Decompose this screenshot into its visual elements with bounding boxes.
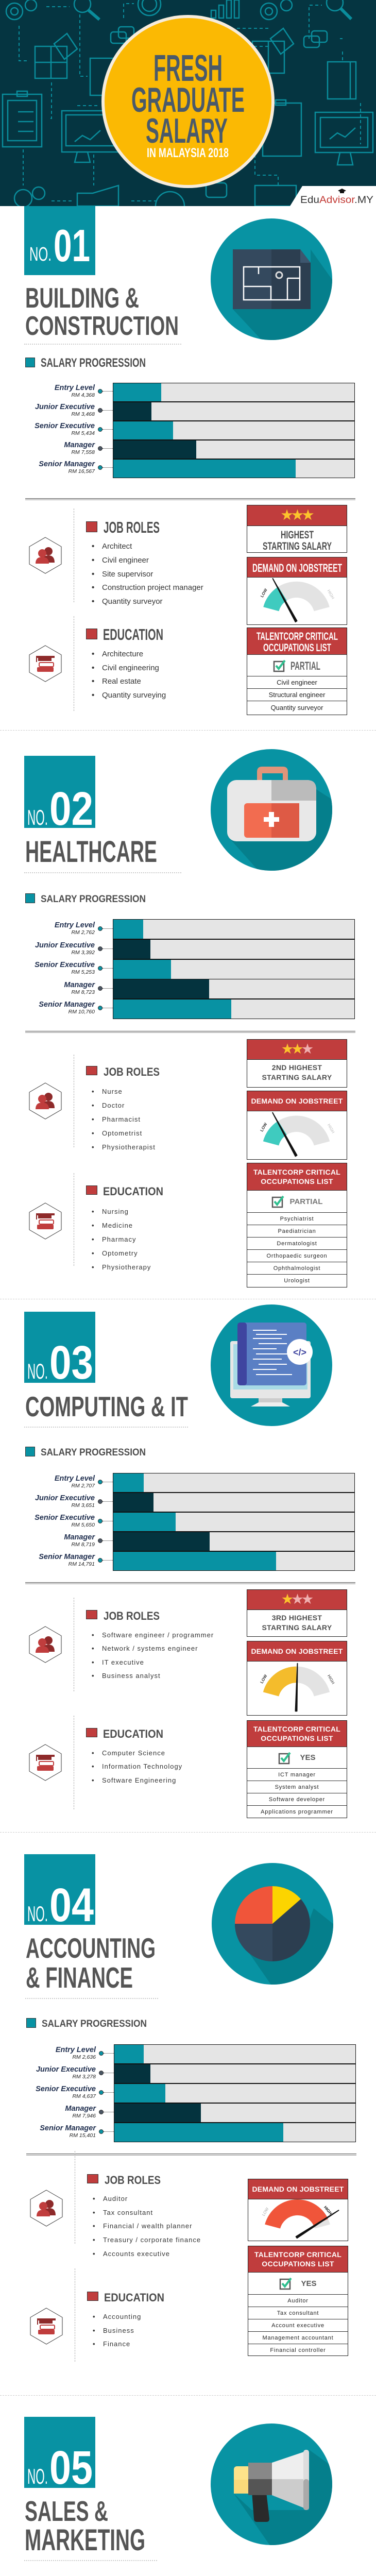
education: • [93, 2340, 96, 2348]
education: Pharmacy [102, 1235, 136, 1243]
bar chart: Senior Executive [35, 1514, 95, 1522]
education: Accounting [103, 2313, 141, 2320]
job roles: • [92, 542, 94, 551]
education: Optometry [102, 1249, 138, 1257]
education: • [92, 1263, 95, 1271]
talentcorp list: Dermatologist [277, 1241, 317, 1247]
bar chart: Junior Executive [36, 2065, 96, 2074]
badge: 3rd highest starting salary: STARTING SALARY [262, 1623, 332, 1632]
logo [290, 186, 376, 206]
job roles: Software engineer / programmer [102, 1631, 214, 1639]
job roles: IT executive [102, 1658, 144, 1666]
bar chart: RM 4,368 [71, 392, 95, 398]
job roles: • [92, 1631, 95, 1639]
job roles: • [92, 1129, 95, 1137]
icon: education [30, 2308, 63, 2345]
bar chart: RM 3,651 [71, 1502, 95, 1509]
education: • [92, 691, 94, 700]
number box 03 [24, 1312, 95, 1383]
icon: megaphone [211, 2424, 332, 2545]
talentcorp list: Financial controller [270, 2347, 326, 2353]
bar chart: RM 5,253 [71, 969, 95, 975]
gauge: demand medium: LOW [259, 1673, 268, 1684]
talentcorp list: Account executive [271, 2323, 324, 2329]
bar chart: RM 16,567 [69, 468, 95, 474]
number box 01: NO. [29, 244, 52, 265]
bar chart: RM 8,723 [71, 989, 95, 995]
salary heading [25, 358, 35, 367]
bar chart [35, 919, 355, 1019]
job roles: • [92, 1658, 95, 1666]
badge: highest starting salary: HIGHEST [280, 529, 314, 541]
education [87, 2291, 164, 2348]
education: EDUCATION [103, 1727, 163, 1740]
job roles: • [92, 1088, 95, 1095]
gauge: demand low: DEMAND ON JOBSTREET [251, 1097, 343, 1105]
job roles: Site supervisor [102, 570, 153, 579]
bar chart: Manager [64, 1533, 95, 1541]
bar chart: RM 2,707 [71, 1483, 95, 1489]
talentcorp list: TALENTCORP CRITICAL [253, 1725, 340, 1733]
education: Physiotherapy [102, 1263, 151, 1271]
============ SECTION 4 ============ [24, 1854, 356, 2362]
bar chart: RM 3,278 [72, 2074, 96, 2080]
============ SECTION 3 ============: SALARY PROGRESSION [41, 1447, 146, 1458]
job roles: • [93, 2236, 96, 2244]
title ellipse [101, 15, 275, 188]
job roles: • [93, 2250, 96, 2258]
bar chart: RM 2,762 [71, 929, 95, 936]
job roles: • [92, 583, 94, 592]
gauge: demand high: HIGH [323, 2205, 333, 2216]
job roles: Civil engineer [102, 556, 149, 565]
job roles: • [92, 1115, 95, 1123]
icon: blueprint [211, 218, 332, 340]
badge: highest starting salary: ★★★ [281, 508, 313, 522]
job roles: Nurse [102, 1088, 123, 1095]
job roles: • [92, 556, 94, 565]
talentcorp list: OCCUPATIONS LIST [261, 1734, 333, 1742]
salary heading [25, 1447, 35, 1456]
bar chart: RM 10,760 [69, 1009, 95, 1015]
job roles [87, 2174, 201, 2258]
job roles: • [93, 2222, 96, 2230]
============ SECTION 1 ============ [24, 206, 355, 715]
talentcorp list [247, 1720, 347, 1818]
job roles: • [92, 570, 94, 579]
icon: pie chart [212, 1863, 333, 1985]
talentcorp list: Psychiatrist [280, 1216, 314, 1222]
job roles: Treasury / corporate finance [103, 2236, 201, 2244]
talentcorp list: Auditor [287, 2298, 309, 2304]
badge: 2nd highest starting salary: 2ND HIGHEST [272, 1063, 322, 1072]
============ SECTION 4 ============: SALARY PROGRESSION [42, 2019, 147, 2029]
icon: computer code [211, 1304, 332, 1426]
education: Real estate [102, 677, 141, 686]
talentcorp list: Ophthalmologist [274, 1265, 320, 1272]
job roles: Business analyst [102, 1672, 161, 1680]
talentcorp list: Applications programmer [261, 1808, 333, 1815]
icon: education [29, 1744, 62, 1781]
talentcorp list [247, 1163, 347, 1287]
bar chart: RM 7,946 [72, 2113, 96, 2119]
gauge: demand medium: DEMAND ON JOBSTREET [251, 1647, 343, 1655]
bar chart: RM 14,791 [69, 1561, 95, 1567]
talentcorp list: TALENTCORP CRITICAL [253, 1168, 340, 1176]
bar chart: Senior Executive [36, 2085, 96, 2093]
job roles: • [92, 1101, 95, 1109]
job roles: JOB ROLES [104, 1609, 160, 1622]
job roles [86, 1065, 160, 1151]
title [25, 2495, 145, 2553]
bar chart: Manager [65, 2105, 96, 2113]
job roles: • [92, 1672, 95, 1680]
bar chart: RM 5,650 [71, 1522, 95, 1528]
job roles: Optometrist [102, 1129, 142, 1137]
bar chart: Junior Executive [35, 1494, 95, 1502]
salary heading [26, 2018, 36, 2028]
talentcorp list: Software developer [269, 1796, 325, 1802]
talentcorp list [248, 2246, 348, 2356]
education: • [92, 1208, 95, 1215]
talentcorp list: Management accountant [263, 2335, 333, 2341]
title ellipse: GRADUATE [131, 80, 245, 120]
job roles: Financial / wealth planner [103, 2222, 192, 2230]
gauge: demand low: HIGH [326, 589, 335, 600]
education: • [92, 1222, 95, 1229]
gauge: demand low: LOW [259, 1122, 268, 1132]
bar chart: Junior Executive [35, 403, 95, 411]
salary heading [25, 893, 35, 903]
education: • [92, 1235, 95, 1243]
bar chart: RM 4,637 [72, 2093, 96, 2099]
gauge: demand medium [247, 1641, 347, 1716]
============ SECTION 3 ============ [24, 1304, 355, 1818]
job roles: JOB ROLES [104, 1065, 160, 1078]
number box 03: NO. [27, 1359, 48, 1383]
badge: 2nd highest starting salary [247, 1039, 347, 1088]
education: Medicine [102, 1222, 133, 1229]
job roles: Doctor [102, 1101, 125, 1109]
job roles: • [93, 2209, 96, 2216]
icon: people [30, 2190, 63, 2227]
bar chart: Entry Level [55, 921, 95, 929]
job roles: Architect [102, 542, 132, 551]
talentcorp list: PARTIAL [290, 1197, 322, 1206]
talentcorp list: YES [301, 2279, 316, 2287]
bar chart: Entry Level [55, 1475, 95, 1483]
talentcorp list: OCCUPATIONS LIST [262, 2260, 334, 2268]
badge: 3rd highest starting salary: 3RD HIGHEST [272, 1614, 322, 1622]
education: • [92, 650, 94, 658]
title ellipse: IN MALAYSIA 2018 [147, 146, 229, 160]
logo: EduAdvisor .MY [300, 195, 373, 206]
education: • [92, 1762, 95, 1770]
============ SECTION 2 ============: SALARY PROGRESSION [41, 894, 146, 905]
talentcorp list: Structural engineer [269, 690, 325, 699]
talentcorp list: Orthopaedic surgeon [267, 1253, 327, 1259]
============ SECTION 2 ============ [24, 749, 355, 1287]
talentcorp list: TALENTCORP CRITICAL [254, 2250, 341, 2259]
job roles: Accounts executive [103, 2250, 170, 2258]
bar chart [35, 383, 355, 478]
bar chart: Manager [64, 441, 95, 449]
============ SECTION 5 ============ [24, 2417, 332, 2561]
gauge: demand low: LOW [260, 587, 268, 598]
job roles: • [92, 597, 94, 606]
header banner [0, 0, 376, 206]
gauge: demand low [247, 557, 347, 625]
talentcorp list: Civil engineer [277, 678, 317, 686]
bar chart: Senior Manager [39, 460, 95, 468]
education: Information Technology [102, 1762, 182, 1770]
icon: people [29, 537, 62, 574]
badge: 3rd highest starting salary [247, 1589, 347, 1637]
education: Nursing [102, 1208, 129, 1215]
bar chart: RM 15,401 [70, 2132, 96, 2139]
talentcorp list: System analyst [275, 1784, 319, 1790]
badge: 3rd highest starting salary: ★★★ [282, 1592, 312, 1606]
talentcorp list: OCCUPATIONS LIST [261, 1177, 333, 1185]
icon: education [29, 1202, 62, 1240]
bar chart: Manager [64, 981, 95, 989]
talentcorp list: Tax consultant [277, 2310, 319, 2316]
job roles: Tax consultant [103, 2209, 153, 2216]
bar chart [36, 2044, 356, 2142]
gauge: demand high: LOW [261, 2206, 270, 2217]
bar chart: RM 2,636 [72, 2054, 96, 2060]
number box 01 [24, 206, 95, 275]
education [86, 1185, 163, 1271]
job roles: Quantity surveyor [102, 597, 163, 606]
job roles: Physiotherapist [102, 1143, 156, 1151]
bar chart: RM 8,719 [71, 1541, 95, 1548]
bar chart: RM 5,434 [71, 430, 95, 436]
job roles: Network / systems engineer [102, 1645, 198, 1652]
title ellipse: FRESH [153, 48, 223, 89]
education: • [92, 1249, 95, 1257]
bar chart: RM 3,392 [71, 950, 95, 956]
education: EDUCATION [103, 1185, 163, 1198]
talentcorp list [247, 628, 347, 715]
education: Architecture [102, 650, 143, 658]
education: Finance [103, 2340, 130, 2348]
talentcorp list: Paediatrician [278, 1228, 316, 1234]
job roles: Construction project manager [102, 583, 203, 592]
bar chart: Senior Executive [35, 961, 95, 969]
job roles: Pharmacist [102, 1115, 141, 1123]
badge: highest starting salary [247, 505, 347, 553]
icon: computer code: </> [293, 1347, 306, 1358]
bar chart: Entry Level [55, 384, 95, 392]
job roles: JOB ROLES [105, 2174, 161, 2187]
title: SALES & [25, 2495, 108, 2527]
badge: 2nd highest starting salary: ★★★ [282, 1042, 312, 1056]
bar chart: RM 3,468 [71, 411, 95, 417]
education: EDUCATION [104, 2291, 164, 2304]
talentcorp list: YES [300, 1753, 315, 1762]
education: Civil engineering [102, 664, 159, 672]
education [86, 1727, 182, 1784]
education: • [93, 2327, 96, 2334]
education: • [92, 1776, 95, 1784]
gauge: demand medium: HIGH [327, 1674, 336, 1685]
education: • [92, 664, 94, 672]
number box 05 [24, 2417, 95, 2488]
bar chart: RM 7,558 [71, 449, 95, 455]
gauge: demand high [248, 2179, 348, 2241]
gauge: demand low [247, 1091, 347, 1160]
number box 04 [24, 1854, 95, 1925]
education: Computer Science [102, 1749, 165, 1757]
bar chart: Senior Manager [39, 1001, 95, 1009]
job roles: Auditor [103, 2195, 128, 2202]
education: • [92, 1749, 95, 1757]
number box 05: NO. [27, 2464, 48, 2488]
icon: people [29, 1626, 62, 1663]
talentcorp list: Quantity surveyor [271, 704, 323, 711]
talentcorp list: Urologist [284, 1278, 310, 1284]
bar chart [35, 1473, 355, 1571]
education: Quantity surveying [102, 691, 166, 700]
bar chart: Senior Manager [40, 2124, 96, 2132]
talentcorp list: ICT manager [278, 1771, 316, 1777]
job roles [86, 518, 203, 606]
education: • [92, 677, 94, 686]
icon: medical kit [211, 749, 332, 871]
job roles [86, 1609, 214, 1680]
bar chart: Senior Manager [39, 1553, 95, 1561]
title ellipse: SALARY [146, 111, 228, 150]
job roles: • [92, 1645, 95, 1652]
education: • [93, 2313, 96, 2320]
bar chart: Senior Executive [35, 422, 95, 430]
icon: people [29, 1082, 62, 1120]
education: Software Engineering [102, 1776, 176, 1784]
title [25, 283, 179, 340]
job roles: • [93, 2195, 96, 2202]
badge: 2nd highest starting salary: STARTING SALARY [262, 1073, 332, 1081]
education [86, 625, 166, 700]
bar chart: Junior Executive [35, 941, 95, 950]
education: Business [103, 2327, 134, 2334]
icon: education [29, 645, 62, 682]
gauge: demand low: HIGH [327, 1123, 336, 1134]
gauge: demand high: DEMAND ON JOBSTREET [252, 2185, 344, 2193]
bar chart: Entry Level [56, 2046, 96, 2054]
number box 02 [24, 756, 95, 828]
title [26, 1932, 156, 1991]
job roles: • [92, 1143, 95, 1151]
